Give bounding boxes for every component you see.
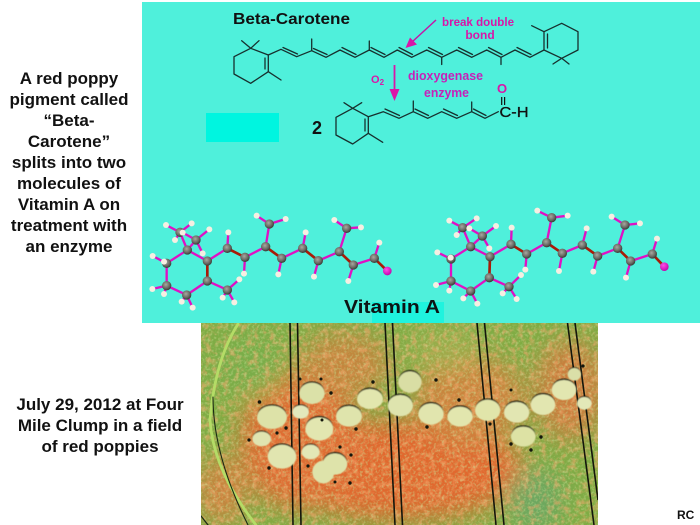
aldehyde group C-H (497, 81, 528, 121)
text block: poppy pigment explanation (9, 69, 129, 256)
label: Vitamin A: Vitamin A (344, 297, 440, 317)
credit: RC initials: RC (677, 508, 695, 522)
callout: break double bond: break double (442, 15, 514, 29)
marker dots around the circles (247, 364, 585, 485)
diagram: beta-carotene skeletal formula (234, 23, 578, 83)
heading: Beta-Carotene: Beta-Carotene (233, 11, 350, 28)
text block: poppy pigment explanation: “Beta- (43, 111, 95, 130)
diagram: retinal skeletal formula (336, 81, 528, 144)
text block: poppy pigment explanation: an enzyme (26, 237, 112, 256)
text block: photo caption: July 29, 2012 at Four (16, 395, 184, 414)
callout: break double bond: bond (465, 28, 495, 42)
text block: photo caption (16, 395, 184, 456)
tramlines: vertical tractor tracks (290, 323, 598, 525)
label: dioxygenase enzyme (408, 69, 483, 100)
field arc: tractor curve on left (201, 324, 256, 525)
molecule: left Vitamin A ball-and-stick model (149, 213, 392, 311)
arrow: reaction with oxygen: 2 (380, 78, 385, 87)
text block: poppy pigment explanation: treatment with (11, 216, 127, 235)
cyan patch rectangle (206, 113, 279, 142)
text block: poppy pigment explanation: splits into two (12, 153, 126, 172)
aldehyde group C-H: C-H (500, 104, 528, 121)
arrow: points at the central double bond (406, 20, 436, 48)
text block: poppy pigment explanation: Vitamin A on (18, 195, 120, 214)
molecule: right Vitamin A ball-and-stick model (433, 208, 669, 307)
text block: poppy pigment explanation: molecules of (17, 174, 121, 193)
text block: poppy pigment explanation: Carotene” (28, 132, 110, 151)
cyan patch behind Vitamin A label (372, 302, 444, 323)
text block: poppy pigment explanation: pigment called (9, 90, 129, 109)
label: coefficient 2: 2 (312, 118, 322, 138)
label: dioxygenase enzyme: enzyme (424, 86, 469, 100)
aldehyde group C-H: O (497, 81, 507, 96)
text block: photo caption: Mile Clump in a field (18, 416, 182, 435)
callout: break double bond (406, 15, 514, 48)
panel: teal chemistry background (142, 2, 700, 323)
arrow: reaction with oxygen: O (371, 74, 380, 86)
label: dioxygenase enzyme: dioxygenase (408, 69, 483, 83)
text block: poppy pigment explanation: A red poppy (20, 69, 119, 88)
photo: crop circle in a poppy field (198, 323, 605, 525)
crop circles: formation of flattened discs (252, 367, 592, 483)
text block: photo caption: of red poppies (41, 437, 159, 456)
arrow: reaction with oxygen (371, 65, 400, 101)
